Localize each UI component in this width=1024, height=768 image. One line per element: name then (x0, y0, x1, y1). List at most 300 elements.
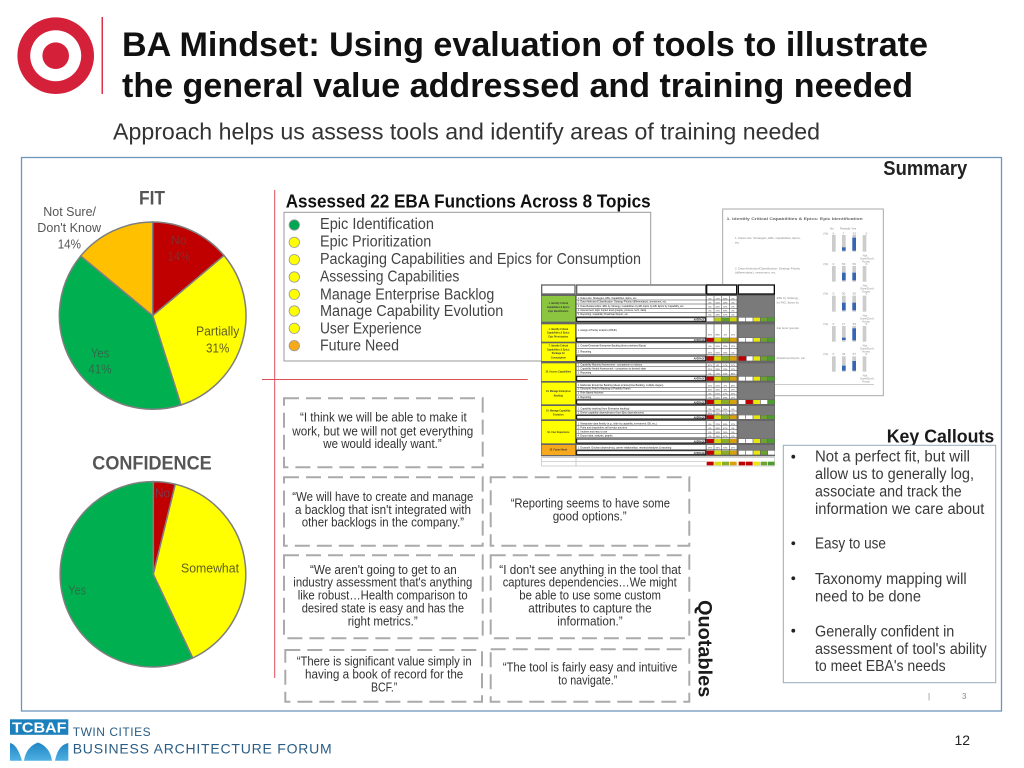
percentage values: 0% (708, 314, 712, 316)
panel: mini survey results: (differentiator), investment, etc. (735, 271, 776, 275)
percentage values: 0% (708, 432, 712, 434)
quote: book of record (285, 650, 482, 702)
quote: make it work: we would ideally want.” (322, 437, 442, 451)
divider lines (262, 190, 528, 678)
panel: mini survey results: 0 (833, 262, 835, 266)
panel: mini survey results: by RIO, Epics by (777, 300, 799, 304)
quote: book of record: “There is significant value simply in (297, 655, 472, 669)
title (122, 26, 928, 105)
callout text: to meet EBA's needs (815, 658, 946, 675)
percentage values: 0% (708, 310, 712, 312)
percentage values: 50% (716, 346, 720, 348)
percentage values: 0% (708, 397, 712, 399)
quote: industry assessment: “We aren't going to get to an (310, 563, 457, 577)
quote: industry assessment: like robust…Health comparison to (298, 588, 468, 602)
section labels: Evolution (553, 414, 564, 417)
section labels: 19. User Experience (547, 432, 570, 434)
percentage values (708, 298, 735, 450)
list box (284, 212, 651, 361)
labels: fit (37, 204, 240, 376)
percentage values: 0% (731, 298, 735, 300)
panel: mini survey results: Know (862, 350, 871, 354)
row descriptions: 4. Assessment: Epic Impact level (people, process, tech, data) (578, 309, 646, 312)
section labels: 7. Identify Critical (549, 345, 568, 348)
percentage values: 33% (723, 448, 728, 450)
panel: mini survey results: (%) (823, 322, 828, 326)
quote: reporting (491, 477, 689, 546)
panel: mini survey results: 0 (833, 352, 835, 356)
quote: industry assessment (284, 555, 483, 638)
panel: mini survey results: 0 (866, 231, 868, 235)
heading: key callouts: Key Callouts (887, 426, 994, 447)
average labels: AVERAGE (694, 416, 705, 419)
percentage values: 17% (731, 397, 735, 399)
section: manage capability evolution (542, 406, 774, 419)
section labels (545, 302, 572, 451)
icon: target logo (17, 17, 103, 94)
status dots (289, 220, 299, 351)
panel: mini survey results: Know (862, 260, 871, 264)
quote: create a backlog: other backlogs in the company.” (302, 516, 464, 530)
section: epic identification (542, 296, 774, 322)
panel: mini survey results: 0 (833, 322, 835, 326)
average labels (694, 319, 705, 455)
quote: dependencies: information.” (557, 614, 623, 628)
row descriptions: 1. Elaborate Enterprise Backlog (Ideas to Enterprise Backlog, multiple stages) (578, 384, 663, 387)
panel: summary image frame (22, 158, 1002, 711)
percentage values: 17% (716, 373, 720, 375)
quote: dependencies: be able to use some custom (519, 588, 661, 602)
row descriptions: 3. Reporting (578, 371, 592, 374)
percentage values: 17% (731, 346, 735, 348)
row descriptions: 1. Capability Maturity Assessment - comparison to industry (578, 363, 643, 366)
labels: confidence: No (155, 485, 170, 500)
logo: tcbaf (10, 719, 332, 761)
quote: dependencies: attributes to capture the (528, 601, 652, 615)
quote: make it work (284, 398, 483, 467)
percentage values: 33% (716, 413, 720, 415)
average labels: AVERAGE (694, 440, 705, 443)
heading: summary: Summary (883, 158, 968, 180)
percentage values: 67% (716, 393, 720, 395)
panel: mini survey results: No (830, 226, 834, 230)
percentage values: 17% (731, 424, 735, 426)
percentage values: 17% (716, 298, 720, 300)
panel: mini survey results: itial level (people (777, 326, 799, 330)
title: BA Mindset: Using evaluation of tools to illustrate (122, 26, 928, 64)
panel: mini survey results: 7 (843, 231, 845, 235)
percentage values: 0% (731, 436, 735, 438)
panel: mini survey results: 50 (842, 292, 846, 296)
list items: Assessing Capabilities (320, 268, 460, 285)
list items: Epic Prioritization (320, 234, 431, 251)
row descriptions: 1. Example: Enchant dependency, career relationships, research/analysis & reporting (578, 446, 672, 449)
pie: confidence slices (60, 482, 246, 667)
panel: mini survey results: EBs by Strategy, (777, 296, 799, 300)
section labels: Capabilities & Epics: (547, 331, 570, 334)
quote: make it work: work, but we will not get everything (291, 425, 473, 439)
panel: mini survey results: 93 (853, 231, 856, 235)
section labels: Package for (552, 353, 565, 355)
section labels: 1. Identify Critical (549, 328, 568, 331)
callout text: associate and track the (815, 483, 962, 500)
row descriptions: 3. Rule Based Archives (578, 392, 604, 395)
callout text: information we care about (815, 501, 985, 518)
percentage values: 0% (731, 310, 735, 312)
percentage values: 0% (731, 352, 735, 354)
panel: mini survey results: Know (862, 320, 871, 324)
labels: fit: 14% (168, 249, 190, 264)
labels: fit: Not Sure/ (43, 204, 96, 219)
pie: fit slices (59, 222, 246, 409)
panel: mini survey results: (%) (823, 352, 828, 356)
panel: assessed functions list (284, 191, 651, 361)
callout box (783, 445, 996, 683)
panel: quotables (284, 398, 715, 702)
percentage values: 50% (723, 302, 728, 304)
panel: mini survey results: (%) (823, 231, 828, 235)
percentage values: 17% (708, 352, 712, 354)
percentage values: 50% (708, 413, 712, 415)
section labels: 1. Identify Critical (549, 302, 568, 305)
percentage values: 17% (731, 393, 735, 395)
logo: tcbaf: BUSINESS ARCHITECTURE FORUM (73, 740, 332, 756)
percentage values: 0% (731, 314, 735, 316)
percentage values: 17% (708, 369, 712, 371)
percentage values: 83% (723, 424, 728, 426)
row descriptions: 1. Assign a Priority to Epics (WSJF) (578, 329, 617, 332)
percentage values: 17% (723, 393, 728, 395)
inner page number: 3 (962, 692, 967, 701)
table: evaluation scorecard (541, 284, 775, 467)
row descriptions (578, 297, 684, 449)
panel: mini survey results: 0 (833, 292, 835, 296)
percentage values: 0% (708, 424, 712, 426)
percentage values: 0% (708, 428, 712, 430)
quote: create a backlog (284, 477, 483, 546)
section labels: Epic Prioritization (548, 335, 569, 338)
average labels: AVERAGE (694, 378, 705, 381)
section labels: 16. Manage Capability (546, 410, 571, 413)
list items: User Experience (320, 320, 422, 337)
percentage values: 67% (723, 436, 728, 438)
percentage values: 50% (716, 385, 720, 387)
quote: book of record: having a book of record for the (305, 668, 463, 682)
heading: assessed functions: Assessed 22 EBA Functions Across 8 Topics (286, 191, 651, 211)
panel: confidence pie chart (60, 453, 246, 667)
row descriptions: 1. Data Lists: Strategies, EBs, Capabilities, Epics, etc. (578, 297, 637, 300)
panel: mini survey results: Not (863, 284, 867, 288)
panel: mini survey results: Not (863, 254, 867, 258)
percentage values: 33% (716, 369, 720, 371)
section labels: Capabilities & Epics: (547, 306, 570, 309)
panel: mini survey results: 67 (853, 352, 856, 356)
confidence colour cells (739, 318, 775, 465)
panel: mini survey results: Partially Yes (840, 226, 857, 230)
percentage values: 33% (716, 389, 720, 391)
percentage values: 17% (731, 389, 735, 391)
percentage values: 0% (724, 389, 727, 391)
quote: book of record: BCF.” (371, 681, 397, 695)
percentage values: 50% (708, 389, 712, 391)
list items: Packaging Capabilities and Epics for Consumption (320, 251, 641, 268)
labels: fit: Partially (196, 324, 240, 339)
row descriptions: 2. Derive capability dependencies (from Epic dependencies) (578, 412, 644, 415)
panel: mini survey results: 50 (853, 262, 856, 266)
quote: easy to navigate (491, 649, 689, 702)
percentage values: 50% (716, 397, 720, 399)
bullets (791, 455, 795, 633)
row descriptions: 3. Intuitive and easy to use (578, 430, 608, 433)
section labels: 22. Future Need (550, 448, 568, 451)
panel: mini survey results: Roadmap Report, etc. (777, 356, 806, 360)
quote: make it work: “I think we will be able to make it (300, 411, 467, 425)
percentage values: 0% (716, 365, 719, 367)
panel: mini survey results: 0 (866, 292, 868, 296)
labels: fit: 14% (58, 236, 81, 251)
table header (542, 285, 774, 294)
percentage values: 33% (723, 346, 728, 348)
panel: mini survey results: Not (863, 344, 867, 348)
percentage values: 33% (716, 314, 720, 316)
panel: mini survey results: 83 (853, 322, 856, 326)
title: the general value addressed and training needed (122, 67, 913, 105)
percentage values: 17% (716, 310, 720, 312)
slide number: 12 (954, 732, 970, 748)
section: future need (542, 445, 774, 455)
percentage values: 0% (708, 436, 712, 438)
percentage values: 33% (723, 369, 728, 371)
average labels: AVERAGE (694, 357, 705, 360)
percentage values: 67% (723, 428, 728, 430)
list items (320, 216, 641, 355)
panel: mini survey results: 0 (866, 352, 868, 356)
average labels: AVERAGE (694, 401, 705, 404)
inner page number: | (928, 692, 930, 701)
heading: quotables: Quotables (694, 600, 715, 697)
percentage values: 0% (708, 409, 712, 411)
callout text: need to be done (815, 588, 921, 605)
logo: tcbaf: TWIN CITIES (73, 725, 151, 739)
labels: confidence: Somewhat (181, 560, 239, 575)
quote: industry assessment: desired state is easy and has the (302, 601, 464, 615)
row descriptions: 3. Data Relationships: EBs by Strategy, Capabilities by EB, Epics by EB, Epics by Capability, etc. (578, 305, 684, 308)
row descriptions: 2. Electronic Feed of Backlog to Portfolio Teams (578, 388, 631, 391)
percentage values: 0% (708, 298, 712, 300)
list items: Manage Enterprise Backlog (320, 286, 494, 303)
quote: create a backlog: “We will have to create and manage (292, 490, 473, 504)
percentage values: 50% (723, 373, 728, 375)
percentage values: 83% (723, 298, 728, 300)
panel: mini survey results: Not (863, 374, 867, 378)
row descriptions: 2. Reporting (578, 351, 592, 354)
panel: mini survey results: 0 (866, 262, 868, 266)
section: assess capabilities (542, 363, 774, 381)
percentage values: 50% (716, 352, 720, 354)
percentage values: 17% (716, 424, 720, 426)
callout text: allow us to generally log, (815, 466, 974, 483)
logo: tcbaf: TCBAF (12, 719, 66, 736)
section labels: Capabilities & Epics: (547, 348, 570, 351)
percentage values: 17% (731, 369, 735, 371)
labels: confidence (68, 485, 239, 597)
percentage values: 50% (716, 306, 720, 308)
labels: fit: Yes (91, 345, 110, 360)
percentage values: 50% (716, 302, 720, 304)
percentage values: 17% (708, 385, 712, 387)
panel: mini survey results: Sure/Don't (860, 257, 874, 261)
percentage values: 17% (731, 365, 735, 367)
section labels: Backlog (554, 396, 563, 398)
row descriptions: 5. Reporting: Capability Roadmap Report, etc. (578, 313, 629, 316)
percentage values: 83% (716, 334, 720, 336)
panel: mini survey results: 0 (833, 231, 835, 235)
percentage values: 0% (731, 428, 735, 430)
callout text: assessment of tool's ability (815, 641, 987, 658)
percentage values: 33% (731, 373, 735, 375)
percentage values: 83% (723, 310, 728, 312)
percentage values: 33% (723, 397, 728, 399)
panel: mini survey results: 33 (842, 352, 846, 356)
panel: mini survey results: 1. Data Lists: Strategies, EBs, Capabilities, Epics, (735, 236, 801, 240)
percentage values: 0% (724, 385, 727, 387)
percentage values: 33% (716, 428, 720, 430)
average labels: AVERAGE (694, 319, 705, 322)
percentage values: 0% (708, 306, 712, 308)
labels: fit: 41% (88, 361, 112, 376)
heading: confidence: CONFIDENCE (92, 453, 212, 474)
list items: Manage Capability Evolution (320, 303, 503, 320)
panel: mini survey results: 1. Identify Critical Capabilities & Epics: Epic Identification (727, 217, 863, 221)
section labels: 10. Assess Capabilities (545, 370, 572, 373)
percentage values: 67% (723, 314, 728, 316)
percentage values: 0% (708, 302, 712, 304)
row descriptions: 2. Data Attribution/Classification: Strategy Priority (differentiator), investment, etc. (578, 301, 667, 304)
quote: industry assessment: industry assessment that's anything (293, 576, 472, 590)
section labels: Consumption (551, 357, 566, 360)
panel: fit pie chart (37, 188, 246, 409)
panel: mini survey results: Not (863, 314, 867, 318)
panel: mini survey results: Sure/Don't (860, 377, 874, 381)
row descriptions: 2. Point and drop/online self service any time (578, 426, 628, 429)
row descriptions: 1. Capability tracking (from Enterprise backlog) (578, 408, 629, 411)
percentage values: 50% (716, 432, 720, 434)
subtitle: Approach helps us assess tools and identify areas of training needed (113, 118, 820, 144)
quote: dependencies: captures dependencies…We might (503, 576, 677, 590)
callout text: Taxonomy mapping will (815, 571, 967, 588)
quote: reporting: “Reporting seems to have some (511, 497, 670, 511)
panel: mini survey results: 2. Data Attribution/Classification: Strategy Priority (735, 266, 801, 270)
percentage values: 50% (723, 409, 728, 411)
panel: mini survey results: 50 (853, 292, 856, 296)
panel: mini survey results: etc. (735, 240, 740, 244)
percentage values: 50% (716, 409, 720, 411)
section: user experience (542, 421, 774, 443)
panel: mini survey results: Sure/Don't (860, 347, 874, 351)
panel: mini survey results: 0 (866, 322, 868, 326)
percentage values: 17% (723, 365, 728, 367)
percentage values: 0% (724, 334, 727, 336)
average rows (577, 318, 706, 455)
percentage values: 17% (723, 413, 728, 415)
quote: industry assessment: right metrics.” (348, 614, 418, 628)
percentage values: 33% (716, 436, 720, 438)
percentage columns (707, 296, 737, 450)
section labels: Epic Identification (548, 310, 569, 313)
table footer rows (542, 457, 774, 466)
quote: dependencies (491, 555, 689, 638)
section: epic prioritization (542, 324, 774, 342)
section: manage enterprise backlog (542, 383, 774, 404)
average labels: AVERAGE (694, 339, 705, 342)
callout text: Not a perfect fit, but will (815, 449, 970, 466)
table backdrop (541, 294, 775, 456)
percentage values: 17% (708, 334, 712, 336)
percentage values: 0% (731, 302, 735, 304)
panel: mini survey results (723, 209, 883, 396)
panel: mini survey results: Sure/Don't (860, 287, 874, 291)
labels: fit: Don't Know (37, 220, 102, 235)
percentage values: 17% (731, 448, 735, 450)
panel: mini survey results: (%) (823, 292, 828, 296)
percentage values: 17% (731, 334, 735, 336)
row descriptions: 4. Reporting (578, 396, 592, 399)
row descriptions: 2. Capability Health Assessment - comparison to desired state (578, 367, 647, 370)
row rules (577, 300, 737, 449)
percentage values: 0% (731, 432, 735, 434)
percentage values: 0% (731, 409, 735, 411)
percentage values: 67% (708, 365, 712, 367)
heading: fit: FIT (139, 188, 165, 209)
panel: mini survey results: 17 (842, 322, 846, 326)
panel: key callouts (783, 426, 996, 683)
percentage values: 50% (723, 432, 728, 434)
percentage values: 33% (731, 385, 735, 387)
average colour cells (707, 318, 737, 465)
percentage values: 17% (708, 448, 712, 450)
quote: reporting: good options.” (553, 510, 627, 524)
quote: easy to navigate: to navigate.” (558, 673, 617, 687)
callout text (815, 449, 987, 675)
row descriptions: 4. Export data, analysis, graphs (578, 434, 613, 437)
percentage values: 33% (723, 352, 728, 354)
section labels: 13. Manage Enterprise (546, 390, 571, 393)
row descriptions: 1. Create/Generate Enterprise Backlog (from prioritized Epics) (578, 345, 646, 348)
inner page number (928, 692, 967, 701)
labels: fit: No (171, 232, 187, 247)
panel: mini survey results: (%) (823, 262, 828, 266)
percentage values: 0% (708, 393, 712, 395)
callout text: Generally confident in (815, 624, 954, 641)
panel: mini survey results: Know (862, 290, 871, 294)
average labels: AVERAGE (694, 452, 705, 455)
labels: fit: 31% (206, 341, 230, 356)
panel: mini survey results: Sure/Don't (860, 317, 874, 321)
percentage values: 0% (731, 306, 735, 308)
percentage values: 33% (716, 448, 720, 450)
percentage values: 0% (708, 373, 712, 375)
quote: dependencies: “I don't see anything in the tool that (499, 563, 681, 577)
panel: mini survey results: 50 (842, 262, 846, 266)
panel: mini survey results: Know (862, 380, 871, 384)
quote: easy to navigate: “The tool is fairly easy and intuitive (503, 660, 677, 674)
list items: Future Need (320, 338, 399, 355)
list items: Epic Identification (320, 216, 434, 233)
percentage values: 0% (731, 413, 735, 415)
callout text: Easy to use (815, 536, 886, 553)
labels: confidence: Yes (68, 582, 86, 597)
percentage values: 0% (708, 346, 712, 348)
